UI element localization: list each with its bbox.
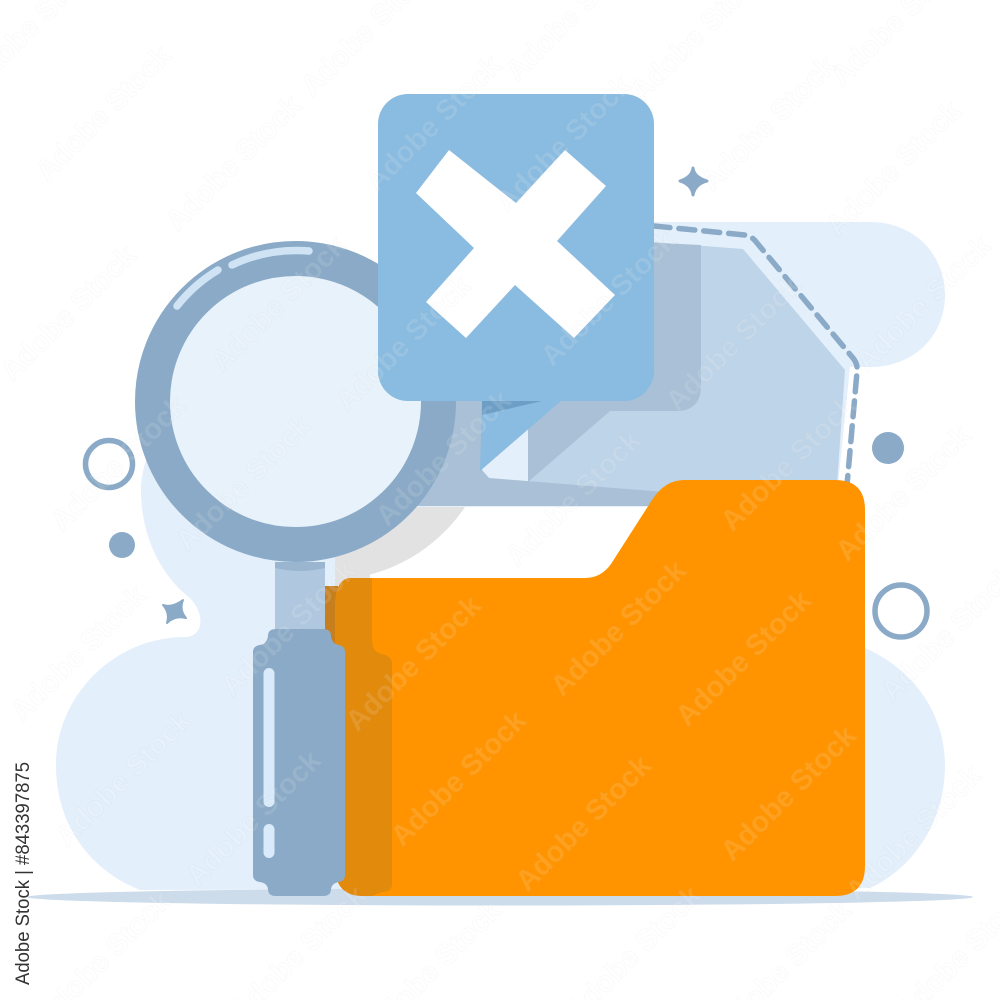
background blob <box>56 222 945 890</box>
lens shadow on document <box>417 400 665 506</box>
decorative dot left <box>109 532 135 558</box>
watermark: Adobe Stock <box>340 589 488 738</box>
watermark: Adobe Stock <box>370 384 518 533</box>
folder <box>324 480 865 896</box>
ground shadow <box>27 888 973 906</box>
watermark: Adobe Stock <box>660 269 808 418</box>
watermark: Adobe Stock <box>30 39 178 188</box>
handle grip <box>253 629 345 896</box>
watermark: Adobe Stock <box>830 419 978 568</box>
watermark: Adobe Stock <box>205 229 353 378</box>
lens cast shadow <box>335 507 465 588</box>
rim highlights <box>177 250 309 306</box>
dashed outline <box>654 226 857 485</box>
neck collar <box>275 562 325 571</box>
watermark: Adobe Stock <box>490 69 638 218</box>
watermark: Adobe Stock <box>850 229 998 378</box>
watermark: Adobe Stock <box>535 224 683 373</box>
tail fold <box>482 401 542 415</box>
watermark: Adobe Stock <box>500 424 648 573</box>
document sheet <box>417 240 845 506</box>
handle neck <box>275 562 325 632</box>
watermark: Adobe Stock <box>670 584 818 733</box>
watermark: Adobe Stock <box>840 759 988 908</box>
folder back edge <box>324 586 338 646</box>
folder front <box>335 480 865 896</box>
watermark: Adobe Stock <box>45 389 193 538</box>
bubble shadow on document <box>528 240 701 482</box>
white gap behind folder <box>335 507 675 607</box>
magnifying glass <box>152 250 438 896</box>
watermark: Adobe Stock <box>715 389 863 538</box>
lens glass <box>170 276 422 528</box>
watermark: Adobe Stock <box>385 704 533 853</box>
decorative ring right <box>875 585 927 637</box>
stock id caption: Adobe Stock | #843397875 <box>13 762 34 985</box>
watermark: Adobe Stock <box>170 409 318 558</box>
watermark: Adobe Stock <box>330 269 478 418</box>
watermark: Adobe Stock <box>5 579 153 728</box>
watermark: Adobe Stock <box>715 719 863 868</box>
grip highlights <box>264 668 274 807</box>
bubble body <box>378 94 654 401</box>
watermark: Adobe Stock <box>510 749 658 898</box>
watermark: Adobe Stock <box>545 554 693 703</box>
icon: sparkle top right <box>680 168 707 195</box>
handle shadow on folder <box>335 578 392 896</box>
watermark: Adobe Stock <box>215 554 363 703</box>
watermark: Adobe Stock <box>820 94 968 243</box>
lens rim <box>152 258 438 544</box>
watermark: Adobe Stock <box>180 744 328 893</box>
watermark: Adobe Stock <box>360 49 508 198</box>
watermark: Adobe Stock <box>50 704 198 853</box>
icon: sparkle left <box>163 600 186 623</box>
decorative dot right <box>872 432 904 464</box>
bubble tail <box>480 400 562 471</box>
watermark: Adobe Stock <box>695 49 843 198</box>
decorative ring left <box>86 440 132 488</box>
watermark: Adobe Stock <box>160 89 308 238</box>
icon: white cross <box>416 150 615 338</box>
error speech bubble <box>378 94 654 471</box>
